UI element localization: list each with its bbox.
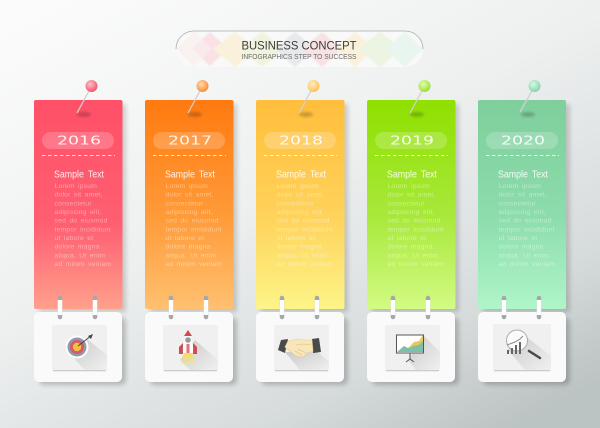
text block: Sample Text [498, 168, 548, 180]
text block: adipiscing elit, [54, 209, 102, 216]
text block: ad minim veniam [498, 261, 555, 268]
text block: aliqua. Ut enim [388, 252, 438, 259]
text block: Lorem ipsum [166, 183, 208, 190]
text block: ut labore et [166, 235, 204, 242]
text block: Lorem ipsum [276, 183, 319, 190]
text block: ut labore et [388, 235, 426, 242]
icon: magnifier [506, 330, 540, 358]
text block: aliqua. Ut enim [276, 252, 327, 259]
year pill [375, 132, 447, 149]
icon: pin [188, 80, 208, 117]
text block: consectetur [388, 200, 425, 207]
panel: 2018 [256, 80, 348, 312]
text block: aliqua. Ut enim [54, 252, 105, 259]
text block: consectetur [54, 200, 92, 207]
text block: tempor incididunt [498, 226, 555, 233]
text block: Sample Text [165, 168, 215, 180]
text block: adipiscing elit, [388, 209, 435, 216]
text block: tempor incididunt [54, 226, 111, 233]
icon card: presentation [367, 298, 459, 385]
icon: target [66, 334, 93, 358]
text block: tempor incididunt [276, 226, 333, 233]
panel: 2020 [478, 80, 570, 312]
panel: 2016 [34, 80, 126, 312]
panel: 2017 [145, 80, 237, 312]
year pill [42, 132, 114, 149]
text block: ut labore et [498, 235, 537, 242]
text block: ad minim veniam [388, 261, 444, 268]
text block [165, 168, 222, 268]
text block: tempor incididunt [166, 226, 222, 233]
year pill [264, 132, 336, 149]
text block [276, 168, 333, 268]
text block: ad minim veniam [166, 261, 222, 268]
title heading: BUSINESS CONCEPT [242, 38, 357, 52]
text block [387, 168, 444, 268]
text block: Sample Text [54, 168, 104, 180]
text block: sed do eiusmod [54, 218, 108, 225]
text block: aliqua. Ut enim [498, 252, 549, 259]
text block: ad minim veniam [276, 261, 333, 268]
icon: pin [520, 80, 540, 117]
year pill: 2020 [501, 132, 545, 148]
text block: sed do eiusmod [388, 218, 441, 225]
icon card: magnifier chart [478, 298, 570, 385]
text block: Sample Text [276, 168, 326, 180]
text block: ut labore et [276, 235, 315, 242]
text block: sed do eiusmod [276, 218, 330, 225]
text block: dolor sit amet, [498, 192, 547, 199]
text block: consectetur [498, 200, 536, 207]
title banner [176, 31, 423, 67]
text block: Lorem ipsum [388, 183, 430, 190]
text block [498, 168, 555, 268]
icon: handshake [278, 338, 321, 357]
icon card: rocket [145, 298, 237, 385]
year pill: 2016 [57, 132, 101, 148]
icon card: handshake [256, 298, 348, 385]
text block: dolor sit amet, [166, 192, 214, 199]
text block: dolor sit amet, [54, 192, 103, 199]
text block: sed do eiusmod [498, 218, 552, 225]
text block: adipiscing elit, [498, 209, 546, 216]
text block: Sample Text [387, 168, 437, 180]
text block: dolore magna [54, 244, 100, 251]
text block: Lorem ipsum [54, 183, 97, 190]
text block: adipiscing elit, [276, 209, 324, 216]
panel: 2019 [367, 80, 459, 312]
text block: tempor incididunt [388, 226, 444, 233]
year pill: 2019 [390, 132, 434, 148]
text block: consectetur [166, 200, 203, 207]
text block: dolor sit amet, [388, 192, 436, 199]
text block: adipiscing elit, [166, 209, 213, 216]
year pill [153, 132, 225, 149]
icon: rocket [179, 330, 197, 365]
icon card: target [34, 298, 126, 385]
text block: ut labore et [54, 235, 93, 242]
year pill: 2018 [279, 132, 323, 148]
text block: aliqua. Ut enim [166, 252, 216, 259]
year pill [486, 132, 558, 149]
text block: ad minim veniam [54, 261, 111, 268]
text block: dolore magna [498, 244, 544, 251]
text block: dolore magna [388, 244, 433, 251]
year pill: 2017 [168, 132, 212, 148]
text block [54, 168, 111, 268]
icon: pin [410, 80, 430, 117]
text block: dolor sit amet, [276, 192, 325, 199]
text block: dolore magna [276, 244, 322, 251]
text block: consectetur [276, 200, 314, 207]
text block: dolore magna [166, 244, 211, 251]
text block: sed do eiusmod [166, 218, 219, 225]
subtitle: INFOGRAPHICS STEP TO SUCCESS [242, 52, 357, 61]
icon: pin [77, 80, 98, 117]
icon: pin [299, 80, 320, 117]
text block: Lorem ipsum [498, 183, 541, 190]
icon: presentation board [396, 335, 424, 362]
